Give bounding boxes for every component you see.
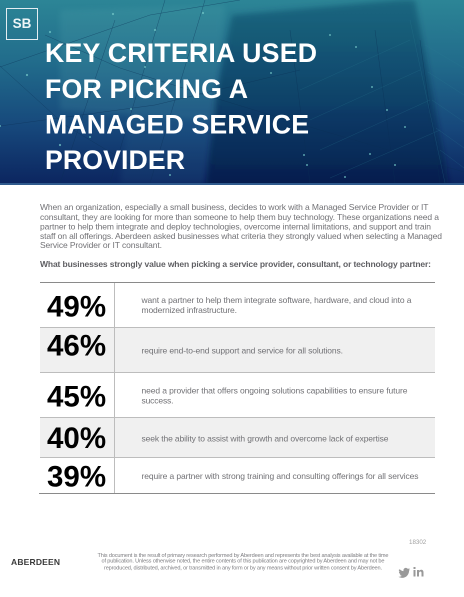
statistics table	[39, 282, 435, 494]
intro paragraph: staff on all offerings. Aberdeen asked businesses what criteria they strongly valued when selecting a Managed	[40, 231, 442, 241]
intro paragraph: consultant, they are looking for more than someone to help them buy technology. These organizations need a	[40, 212, 439, 222]
row: 40%: seek the ability to assist with growth and overcome lack of expertise	[142, 434, 389, 444]
disclaimer: reproduced, distributed, archived, or transmitted in any form or by any means without prior written consent by Aberdeen.	[104, 566, 382, 572]
Aberdeen logo: ABERDEEN	[11, 557, 60, 567]
icon: linkedin	[414, 567, 424, 576]
row: 49%	[47, 290, 412, 324]
logo badge: SB	[6, 8, 38, 40]
row: 46%: require end-to-end support and service for all solutions.	[142, 346, 343, 356]
row: 40%	[47, 422, 389, 455]
title: KEY CRITERIA USED	[45, 38, 317, 68]
row: 49%: want a partner to help them integrate software, hardware, and cloud into a	[140, 295, 412, 305]
table subheading: What businesses strongly value when picking a service provider, consultant, or technology partner:	[40, 259, 431, 269]
row: 49%: 49%	[47, 290, 106, 324]
logo badge: SB: SB	[13, 16, 32, 31]
row: 46%	[47, 330, 343, 362]
intro paragraph: Service Provider or IT consultant.	[40, 240, 162, 250]
title: MANAGED SERVICE	[45, 110, 309, 140]
row: 39%	[47, 460, 418, 494]
row: 45%: need a provider that offers ongoing solutions capabilities to ensure future	[142, 386, 408, 396]
row: 39%: require a partner with strong training and consulting offerings for all services	[142, 471, 418, 481]
row: 45%	[47, 380, 408, 414]
title: PROVIDER	[45, 145, 185, 175]
disclaimer	[98, 553, 388, 572]
row: 46%: 46%	[47, 330, 106, 362]
row: 40%: 40%	[47, 422, 106, 455]
row: 39%: 39%	[47, 460, 106, 494]
intro paragraph	[40, 202, 442, 250]
icon: twitter	[398, 568, 410, 578]
intro paragraph: When an organization, especially a small business, decides to work with a Managed Service Provider or IT	[40, 202, 428, 212]
row: 49%: modernized infrastructure.	[142, 305, 237, 315]
document number: 18302	[409, 539, 427, 546]
row: 45%: 45%	[47, 380, 106, 414]
title	[45, 38, 317, 175]
title: FOR PICKING A	[45, 74, 248, 104]
disclaimer: of publication. Unless otherwise noted, the entire contents of this publication are copyrighted by Aberdeen and may not be	[102, 558, 384, 564]
disclaimer: This document is the result of primary research performed by Aberdeen and represents the best analysis available at the time	[98, 553, 388, 559]
intro paragraph: partner to help them integrate and deploy technologies, overcome internal limitations, and support and train	[40, 222, 431, 232]
row: 45%: success.	[142, 396, 174, 406]
header banner	[0, 0, 464, 190]
